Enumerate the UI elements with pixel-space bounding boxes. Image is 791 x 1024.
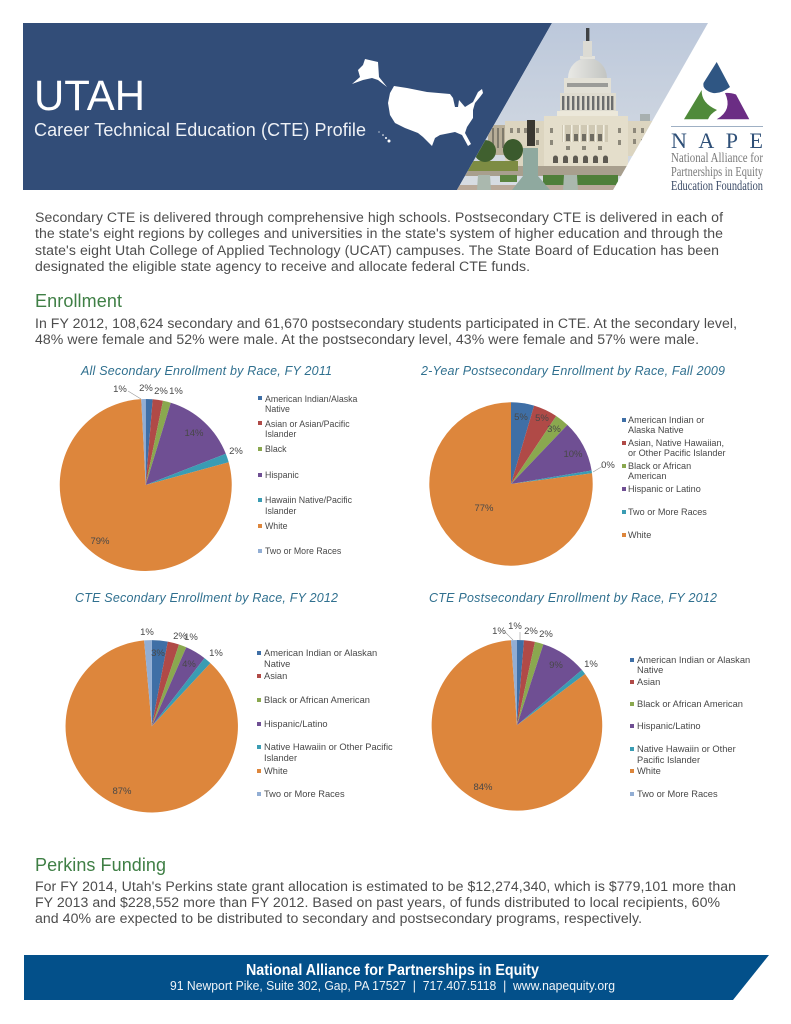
legend: White [628,530,651,540]
legend [257,648,393,799]
legend: American Indian or [628,415,704,425]
chart: CTE Secondary Enrollment [66,591,393,812]
central block [544,116,628,166]
data labels: 4% [182,659,196,670]
data labels: 14% [184,428,204,439]
legend: Asian or Asian/Pacific [265,419,350,429]
legend: Islander [265,506,296,516]
legend: Islander [264,753,297,763]
legend: American Indian or Alaskan [264,648,377,658]
legend: American Indian/Alaska [265,394,358,404]
data labels: 3% [151,648,165,659]
data labels: 2% [539,629,553,640]
intro paragraph: the state's eight regions by colleges and universities in the state's system of higher education and through the [35,225,723,241]
data labels [473,621,598,793]
legend: Black or African American [264,695,370,705]
chart title: All Secondary Enrollment by Race, FY 2011 [80,364,332,378]
legend: Black [265,444,287,454]
data labels: 1% [209,648,223,659]
legend: Hawaiin Native/Pacific [265,495,353,505]
legend: Asian, Native Hawaiian, [628,438,724,448]
data labels: 0% [601,460,615,471]
legend: Two or More Races [265,546,342,556]
funding paragraph: FY 2013 and $228,552 more than FY 2012. Based on past years, of funds distributed to local recipients, 60% [35,894,720,910]
data labels: 1% [508,621,522,632]
wings [505,121,544,166]
legend [622,415,726,540]
legend: Native Hawaiin or Other [637,744,736,754]
dome base and colonnade [557,111,618,116]
legend: Asian [637,677,660,687]
data labels: 3% [547,424,561,435]
data labels: 1% [169,386,183,397]
legend: Hispanic/Latino [264,719,328,729]
data labels [90,383,243,547]
legend: White [264,766,288,776]
title: UTAH [34,72,145,120]
legend [258,394,358,556]
photo: US Capitol [450,23,710,190]
legend: Pacific Islander [637,755,700,765]
data labels: 2% [154,386,168,397]
data labels: 1% [184,632,198,643]
pie [60,399,232,571]
legend: or Other Pacific Islander [628,448,726,458]
chart title: CTE Secondary Enrollment by Race, FY 2012 [75,591,338,605]
data labels: 1% [113,384,127,395]
legend [630,655,750,799]
pie [432,640,602,811]
heading: Perkins Funding: Perkins Funding [35,855,166,875]
legend: Hispanic or Latino [628,484,701,494]
chart title: CTE Postsecondary Enrollment by Race, FY 2012 [429,591,717,605]
funding paragraph [35,878,736,926]
data labels: 1% [140,627,154,638]
enrollment paragraph [35,315,737,347]
icon: tri-colour triangle [684,62,749,119]
equestrian statue [512,148,550,190]
contact details: 91 Newport Pike, Suite 302, Gap, PA 17527 | 717.407.5118 | www.napequity.org [170,978,615,993]
pie [429,402,593,566]
legend: Native Hawaiin or Other Pacific [264,742,393,752]
intro paragraph [35,209,723,274]
legend: Native [265,404,290,414]
banner background [23,23,552,190]
legend: Hispanic [265,470,299,480]
funding paragraph: and 40% are expected to be distributed to secondary and postsecondary programs, respectively. [35,910,642,926]
data labels: 2% [139,383,153,394]
organisation name [671,151,763,194]
intro paragraph: designated the eligible state agency to receive and allocate federal CTE funds. [35,258,530,274]
NAPE letters: NAPE [671,128,763,153]
enrollment paragraph: In FY 2012, 108,624 secondary and 61,670 postsecondary students participated in CTE. At the secondary level, [35,315,737,331]
data labels: 2% [229,446,243,457]
heading: Enrollment: Enrollment [35,291,122,311]
data labels: 9% [549,660,563,671]
chart title: 2-Year Postsecondary Enrollment by Race, Fall 2009 [420,364,725,378]
subtitle: Career Technical Education (CTE) Profile [34,120,366,140]
data labels: 1% [492,626,506,637]
legend: Native [264,659,290,669]
legend: Alaska Native [628,425,684,435]
legend: Native [637,665,663,675]
data labels: 79% [90,536,110,547]
footer band [24,955,769,1000]
intro paragraph: Secondary CTE is delivered through comprehensive high schools. Postsecondary CTE is delivered in each of [35,209,723,225]
enrollment paragraph: 48% were female and 52% were male. At the postsecondary level, 43% were female and 57% were male. [35,331,699,347]
data labels [112,627,223,797]
data labels: 10% [563,449,583,460]
intro paragraph: state's eight Utah College of Applied Technology (UCAT) campuses. The State Board of Education has been [35,242,719,258]
data labels: 77% [474,503,494,514]
logo: NAPE [671,62,763,194]
organisation name: National Alliance for Partnerships in Equity [246,962,539,979]
legend: American Indian or Alaskan [637,655,750,665]
chart: CTE Postsecondary Enrollment [429,591,750,811]
header banner [23,23,710,190]
legend: Hispanic/Latino [637,721,701,731]
legend: White [637,766,661,776]
data labels: 2% [173,631,187,642]
legend: Two or More Races [628,507,707,517]
chart: 2-Year Postsecondary Enrollment [420,364,726,566]
data labels: 2% [524,626,538,637]
legend: Black or African American [637,699,743,709]
data labels [474,412,615,514]
legend: Asian [264,671,287,681]
data labels: 5% [535,413,549,424]
legend: American [628,471,666,481]
data labels: 87% [112,786,132,797]
legend: Two or More Races [264,789,345,799]
pie [66,640,238,812]
chart: All Secondary Enrollment [60,364,358,571]
data labels: 5% [514,412,528,423]
grounds [465,166,627,176]
data labels: 1% [584,659,598,670]
icon: US map [352,59,483,146]
organisation name: National Alliance for [671,151,763,166]
data labels: 84% [473,782,493,793]
legend: White [265,521,288,531]
legend: Islander [265,429,296,439]
legend: Two or More Races [637,789,718,799]
far left wing [488,125,505,155]
legend: Black or African [628,461,691,471]
funding paragraph: For FY 2014, Utah's Perkins state grant allocation is estimated to be $12,274,340, which is $779,101 more than [35,878,736,894]
